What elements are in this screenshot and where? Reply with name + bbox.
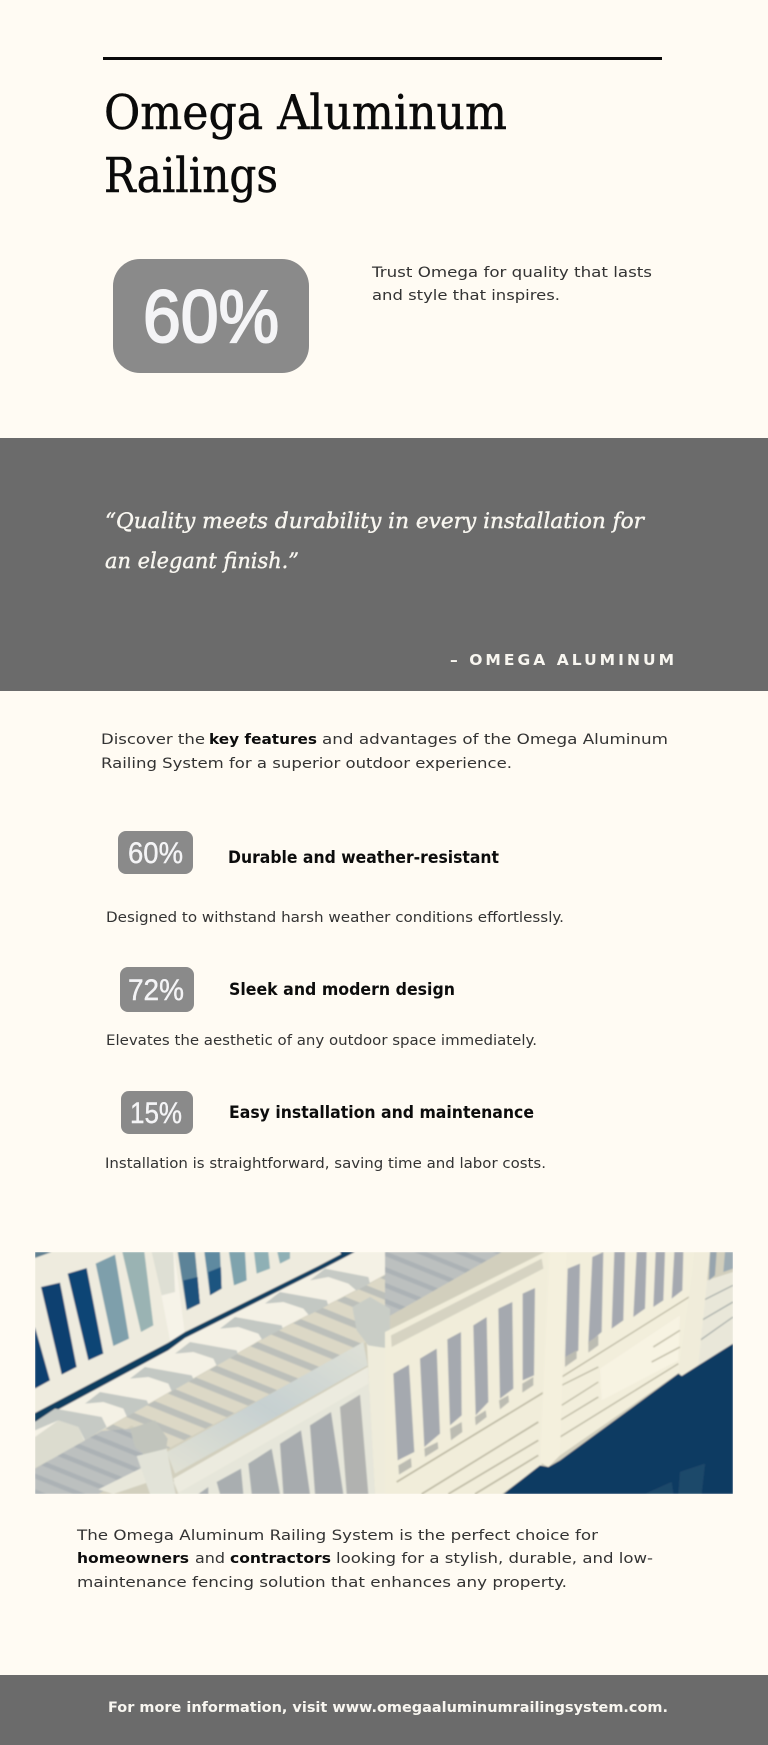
intro text: Railing System for a superior outdoor experience. <box>101 756 512 772</box>
navy ground <box>503 1344 733 1494</box>
quote text <box>105 509 646 573</box>
closing text: and <box>195 1551 225 1567</box>
photo: white railing on deck <box>35 1252 733 1494</box>
badge: 72% <box>120 967 194 1012</box>
deck <box>35 1275 385 1494</box>
quote text: an elegant finish.” <box>105 549 299 573</box>
quote text: “Quality meets durability in every installation for <box>105 509 646 533</box>
back fence <box>35 1252 385 1422</box>
footer text: For more information, visit www.omegaaluminumrailingsystem.com. <box>108 1700 668 1716</box>
far right <box>698 1272 733 1365</box>
badge: 15%: 15% <box>130 1097 182 1130</box>
tagline text <box>371 265 652 304</box>
feature heading: Easy installation and maintenance <box>229 1103 534 1122</box>
right post <box>678 1252 710 1376</box>
title: Railings <box>104 148 278 204</box>
intro text: Discover the <box>101 732 205 748</box>
planter <box>35 1252 385 1468</box>
intro text <box>101 732 668 772</box>
feature description: Elevates the aesthetic of any outdoor space immediately. <box>106 1033 537 1049</box>
central panel <box>540 1252 695 1462</box>
feature heading: Durable and weather-resistant <box>228 848 499 867</box>
badge: 60% <box>118 831 193 874</box>
tagline text: and style that inspires. <box>372 288 560 304</box>
feature 1 <box>106 831 564 926</box>
centre post <box>540 1252 567 1467</box>
badge: 15% <box>121 1091 193 1134</box>
footer band <box>0 1675 768 1745</box>
closing text <box>76 1528 653 1591</box>
left post <box>130 1420 168 1458</box>
title: Omega Aluminum <box>104 85 507 141</box>
feature description: Installation is straightforward, saving time and labor costs. <box>105 1156 546 1172</box>
shadow line <box>35 1252 355 1423</box>
feature description: Designed to withstand harsh weather conditions effortlessly. <box>106 910 564 926</box>
quote attribution: – OMEGA ALUMINUM <box>450 651 674 669</box>
intro text: and advantages of the Omega Aluminum <box>322 732 668 748</box>
front left section <box>173 1367 375 1494</box>
panel: quote band <box>0 438 768 691</box>
stat badge: 60%: 60% <box>143 275 279 358</box>
feature 3 <box>105 1091 546 1172</box>
closing text: contractors <box>230 1551 331 1567</box>
feature 2 <box>106 967 537 1049</box>
tagline text: Trust Omega for quality that lasts <box>371 265 652 281</box>
stat badge: 60% <box>113 259 309 373</box>
closing text: The Omega Aluminum Railing System is the perfect choice for <box>76 1528 598 1544</box>
badge: 60%: 60% <box>128 837 183 870</box>
closing text: maintenance fencing solution that enhances any property. <box>77 1575 567 1591</box>
big post <box>367 1329 402 1494</box>
title <box>104 85 507 204</box>
right half <box>385 1252 733 1494</box>
closing text: homeowners <box>77 1551 189 1567</box>
badge: 72%: 72% <box>128 974 184 1007</box>
closing text: looking for a stylish, durable, and low- <box>336 1551 653 1567</box>
intro text: key features <box>209 732 317 748</box>
feature heading: Sleek and modern design <box>229 980 455 999</box>
